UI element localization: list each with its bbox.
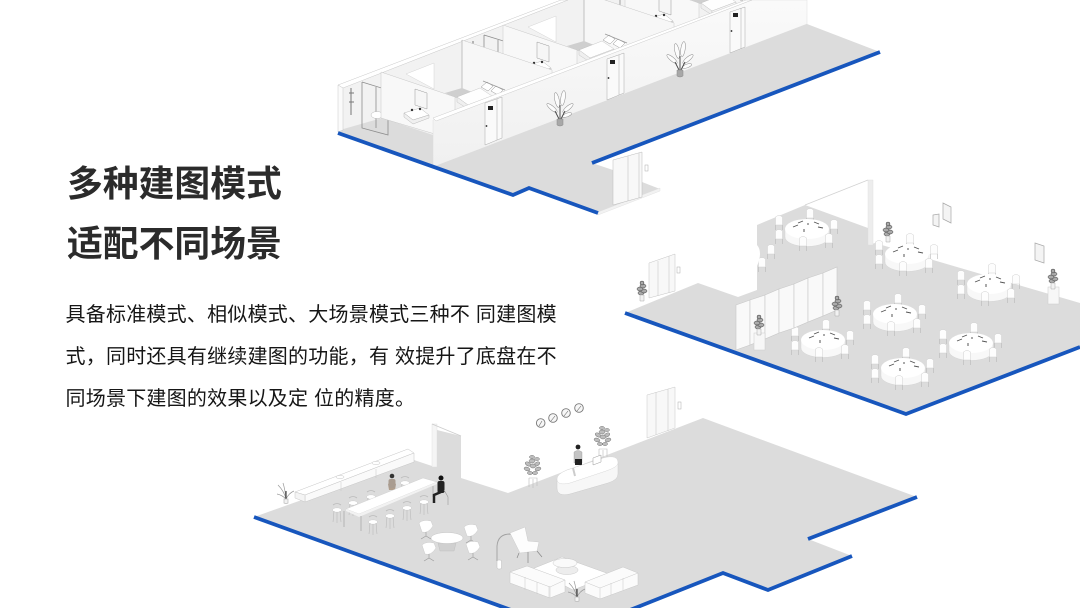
- pedestals and plants: [637, 222, 1059, 350]
- bathroom end wall: [338, 85, 343, 132]
- scene: banquet hall floor plan: [625, 180, 1080, 414]
- plant left: [277, 483, 294, 504]
- scene: hotel rooms floor plan: [338, 0, 880, 215]
- front stools: [368, 496, 428, 535]
- room interiors: [338, 0, 752, 166]
- lounge chair and floor lamp: [497, 527, 542, 569]
- seated person front: [434, 476, 448, 505]
- reception desk: [557, 455, 618, 495]
- subtitle: 适配不同场景: [67, 224, 282, 264]
- back wall line: [805, 180, 868, 205]
- scene: lobby floor plan: [254, 387, 917, 608]
- title: 多种建图模式: [67, 164, 282, 204]
- back stools: [332, 476, 410, 523]
- corridor wall top: [433, 0, 752, 121]
- plant front: [568, 581, 585, 602]
- doorway column: [432, 424, 461, 467]
- corridor wall: [433, 0, 807, 167]
- body text line 3: 同场景下建图的效果以及定 位的精度。: [66, 388, 415, 410]
- blue floor edges: [338, 52, 880, 213]
- bathroom floor: [338, 118, 433, 165]
- sofa group: [510, 557, 638, 599]
- doors: [485, 7, 745, 145]
- ledge edge: [598, 188, 660, 215]
- tables: [776, 208, 1020, 390]
- back wall top: [338, 0, 568, 88]
- plants: [546, 41, 694, 126]
- wall frames: [933, 203, 1044, 263]
- plants behind reception: [524, 426, 611, 488]
- elevator: [613, 152, 648, 205]
- seated person back: [388, 474, 396, 490]
- folding partition: [736, 267, 837, 350]
- rooms: [349, 0, 796, 140]
- blue floor edges: [625, 313, 1080, 414]
- door signs: [486, 13, 738, 127]
- elevator: [649, 254, 680, 298]
- floor: [254, 418, 917, 608]
- partial table at partition: [757, 244, 774, 272]
- column: [868, 180, 873, 245]
- blue floor edges: [254, 497, 917, 608]
- body text line 2: 式，同时还具有继续建图的功能，有 效提升了底盘在不: [66, 346, 557, 368]
- wall clocks: [536, 404, 583, 427]
- receptionist: [574, 445, 582, 465]
- cafe table with chairs: [419, 520, 480, 561]
- elevator: [647, 387, 681, 438]
- body text line 1: 具备标准模式、相似模式、大场景模式三种不 同建图模: [66, 304, 557, 326]
- meeting table: [344, 478, 437, 531]
- sideboard: [295, 449, 414, 502]
- floor: [625, 205, 1080, 414]
- floor: [338, 24, 880, 213]
